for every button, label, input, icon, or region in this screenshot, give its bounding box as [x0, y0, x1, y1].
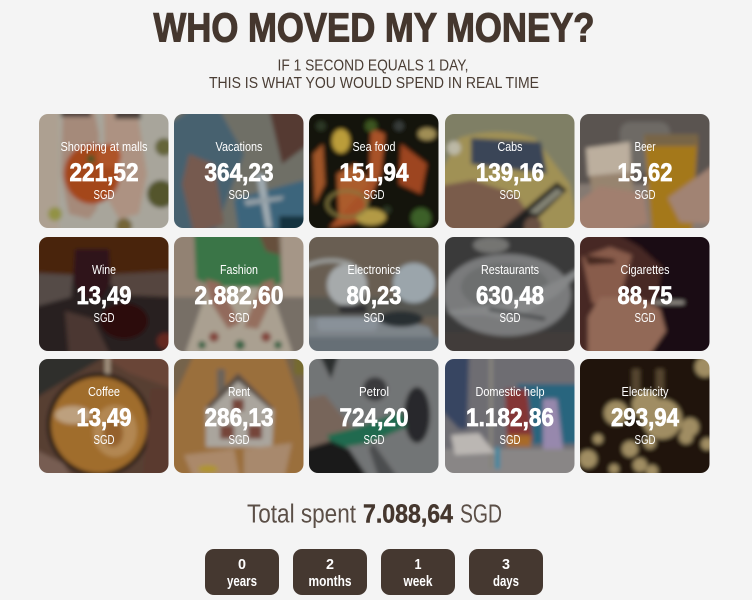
duration: days: days: [493, 573, 519, 590]
label: Fashion: [220, 263, 258, 277]
currency: SGD: [364, 433, 384, 447]
currency: SGD: [500, 188, 520, 202]
label: Cabs: [498, 140, 522, 154]
amount: 2.882,60: [194, 282, 284, 310]
amount: 630,48: [476, 282, 544, 310]
currency: SGD: [94, 433, 114, 447]
duration: months: [293, 549, 367, 595]
duration: years: years: [227, 573, 257, 590]
photo: latte in hands: [39, 359, 168, 473]
amount: 151,94: [340, 159, 409, 187]
photo: earphones: [309, 237, 438, 351]
title: WHO MOVED MY MONEY?: [154, 4, 594, 50]
duration: years: 0: [238, 556, 246, 573]
card: Beer: [580, 114, 710, 228]
photo: model house in hands: [174, 359, 304, 473]
amount: 88,75: [618, 282, 673, 310]
currency: SGD: [94, 311, 114, 325]
total spent: 7.088,64: [363, 500, 454, 528]
duration: months: 2: [326, 556, 334, 573]
label: Electronics: [348, 263, 400, 277]
photo: woman in green shirt and floral skirt: [174, 237, 304, 351]
duration: week: week: [403, 573, 433, 590]
card: Rent: [174, 359, 304, 473]
duration: days: 3: [502, 556, 510, 573]
card: Electricity: [580, 359, 710, 473]
label: Coffee: [88, 385, 120, 399]
duration: week: 1: [414, 556, 422, 573]
amount: 13,49: [76, 282, 132, 310]
total spent: Total spent: [247, 500, 356, 528]
currency: SGD: [228, 311, 250, 325]
total spent: [247, 500, 502, 528]
amount: 13,49: [76, 404, 132, 432]
photo: shrimp and lemon: [309, 114, 438, 228]
label: Shopping at malls: [60, 140, 148, 154]
label: Sea food: [352, 140, 396, 154]
amount: 139,16: [476, 159, 544, 187]
label: Beer: [634, 140, 656, 154]
currency: SGD: [364, 311, 384, 325]
subtitle: [209, 58, 539, 92]
currency: SGD: [228, 188, 250, 202]
currency: SGD: [634, 433, 656, 447]
photo: beer glasses: [580, 114, 710, 228]
duration: years: [205, 549, 279, 595]
photo: empty plate with fork: [445, 237, 574, 351]
currency: SGD: [228, 433, 250, 447]
card: Electronics: [309, 237, 438, 351]
card: Vacations: [174, 114, 304, 228]
amount: 221,52: [70, 159, 138, 187]
subtitle: THIS IS WHAT YOU WOULD SPEND IN REAL TIME: [209, 75, 539, 92]
photo: map and hands: [174, 114, 304, 228]
card: Fashion: [174, 237, 304, 351]
amount: 80,23: [346, 282, 402, 310]
amount: 1.182,86: [466, 404, 554, 432]
amount: 15,62: [618, 159, 672, 187]
amount: 364,23: [204, 159, 274, 187]
card: Coffee: [39, 359, 168, 473]
card: Shopping at malls: [39, 114, 168, 228]
card: Wine: [39, 237, 168, 351]
card: Cigarettes: [580, 237, 710, 351]
currency: SGD: [500, 311, 520, 325]
label: Electricity: [622, 385, 669, 399]
card: Petrol: [309, 359, 438, 473]
amount: 286,13: [204, 404, 274, 432]
card: Cabs: [445, 114, 574, 228]
subtitle: IF 1 SECOND EQUALS 1 DAY,: [278, 58, 468, 74]
label: Petrol: [359, 385, 389, 399]
photo: fuel nozzle: [309, 359, 438, 473]
currency: SGD: [94, 188, 114, 202]
label: Wine: [92, 263, 116, 277]
currency: SGD: [500, 433, 520, 447]
photo: woman smoking: [580, 237, 710, 351]
photo: glowing bulbs: [580, 359, 710, 473]
label: Cigarettes: [620, 263, 670, 277]
duration: days: [469, 549, 543, 595]
currency: SGD: [364, 188, 384, 202]
currency: SGD: [634, 311, 656, 325]
amount: 293,94: [611, 404, 679, 432]
photo: wine glasses: [39, 237, 168, 351]
photo: tomatoes in hands: [39, 114, 168, 228]
currency: SGD: [634, 188, 656, 202]
label: Restaurants: [481, 263, 539, 277]
duration: week: [381, 549, 455, 595]
label: Domestic help: [476, 385, 545, 399]
card: Domestic help: [445, 359, 574, 473]
photo: cleaning supplies: [445, 359, 574, 473]
card: Restaurants: [445, 237, 574, 351]
photo: taxi and phone: [445, 114, 574, 228]
label: Rent: [228, 385, 250, 399]
card: Sea food: [309, 114, 438, 228]
label: Vacations: [216, 140, 262, 154]
amount: 724,20: [340, 404, 408, 432]
total spent: SGD: [460, 500, 502, 528]
duration: months: months: [308, 573, 352, 590]
